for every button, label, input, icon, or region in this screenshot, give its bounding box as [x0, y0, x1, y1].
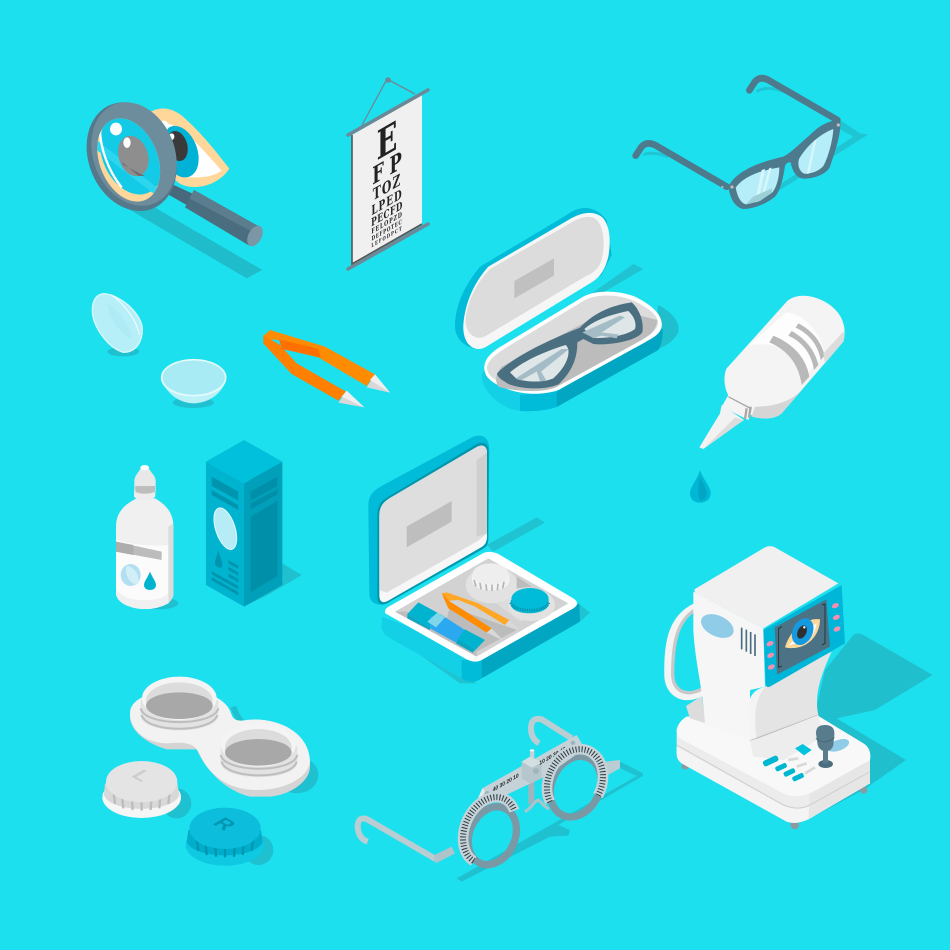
icon: contact lens travel kit: [368, 436, 590, 683]
icon: eyeglasses: [636, 78, 868, 209]
lying lens: [162, 378, 226, 403]
bottle: [138, 597, 178, 609]
box: [243, 563, 302, 607]
cap L: [102, 761, 181, 818]
base: [382, 603, 580, 682]
right graduated dial: [547, 749, 603, 802]
monitor: [763, 585, 845, 687]
chart letters: F P: [372, 147, 402, 192]
control panel: [762, 725, 851, 782]
chart letters: TOZ: [373, 171, 401, 205]
top scale bar: [475, 735, 585, 807]
rear rims: [459, 799, 525, 872]
chart letters: PECFD: [371, 199, 403, 230]
chart letters: DEFPOTEC: [372, 219, 402, 243]
icon: optical trial frame: [358, 719, 643, 882]
top scale bar: 10 20 30 40: [539, 746, 565, 767]
icon: contact lenses: [92, 294, 226, 408]
icon: eye drop bottle with drip: [690, 296, 845, 503]
chart letters: LEFODPCT: [371, 225, 403, 250]
joystick: [816, 725, 834, 768]
chart letters: LPED: [371, 185, 403, 219]
temples: [358, 819, 436, 859]
nozzle: [722, 392, 756, 420]
icon: autorefractor exam machine: [668, 546, 933, 829]
chin rest handle: [668, 607, 705, 696]
tweezers in kit: [442, 592, 520, 641]
chart letters: E: [377, 112, 397, 170]
left well: [141, 677, 218, 730]
base: [482, 327, 663, 411]
folded glasses: [497, 302, 643, 388]
upright lens: [92, 294, 142, 352]
icon: glasses case: [455, 208, 679, 411]
lens case in kit: [466, 563, 555, 622]
cap R: [186, 808, 264, 866]
chart letters: [371, 112, 403, 250]
chart letters: FELOPZD: [371, 210, 403, 236]
open lid: [368, 436, 489, 605]
left graduated dial: [463, 797, 514, 861]
icon: eye chart poster: [348, 77, 428, 269]
icon: contact lens storage case with caps: [102, 677, 318, 866]
lid: [455, 208, 612, 349]
cap R: R: [208, 815, 240, 834]
top scale bar: 40 30 20 10: [493, 773, 519, 794]
illustration canvas: [86, 74, 932, 882]
feet: [681, 762, 689, 770]
machine body: [693, 546, 838, 760]
bottle label band: [749, 312, 825, 377]
icon: solution bottle and box: [116, 440, 302, 609]
icon: magnifying glass over eye: [86, 102, 263, 278]
nose piece: [525, 800, 549, 812]
cap L: L: [126, 767, 157, 785]
right well: [221, 723, 297, 777]
base: [677, 696, 870, 823]
mini solution bottle: [407, 602, 485, 653]
hanger: [362, 79, 415, 125]
icon: orange tweezers: [263, 330, 390, 407]
drop: [690, 470, 711, 503]
case base: [130, 690, 310, 797]
